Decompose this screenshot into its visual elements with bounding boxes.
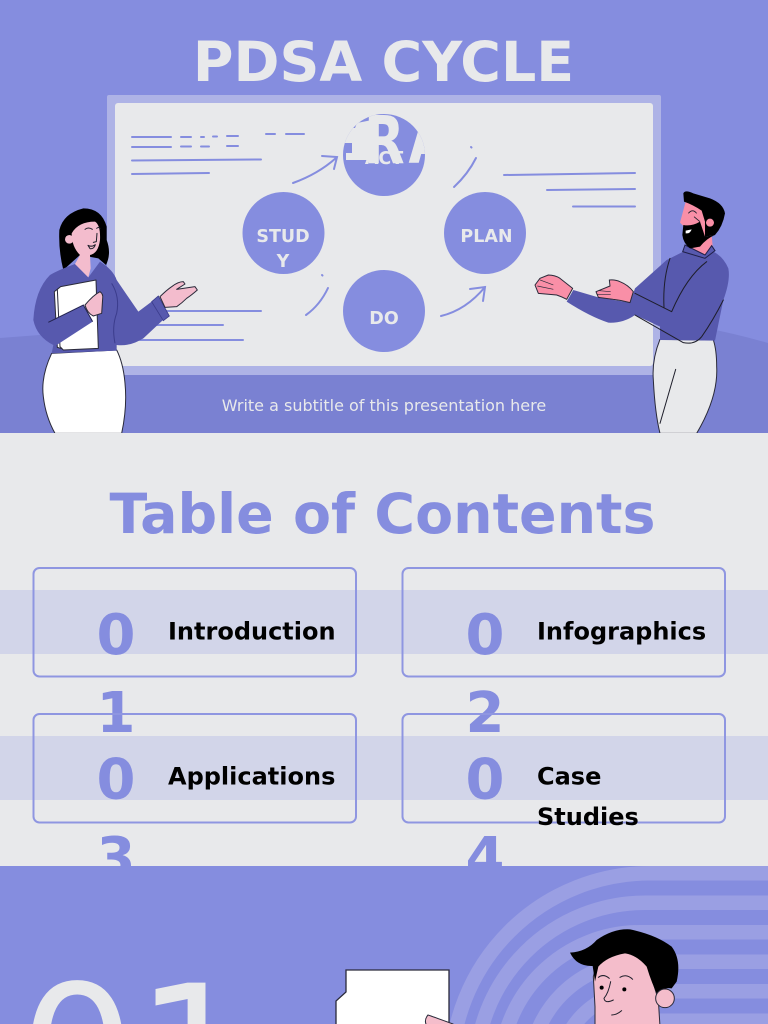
illustration: hand on paper	[425, 1015, 453, 1024]
heading: Table of Contents	[109, 483, 656, 547]
item 02: infographics: 0	[466, 603, 504, 668]
cycle step: study	[242, 192, 324, 274]
cycle step: plan: PLAN	[460, 227, 513, 247]
cycle step: do: DO	[369, 309, 399, 329]
item 02: infographics	[402, 568, 725, 746]
background hill	[0, 330, 768, 433]
arrow: act to plan	[454, 147, 476, 187]
item 02: infographics: 2	[466, 681, 504, 746]
cycle step: study: Y	[276, 252, 290, 272]
panel: section 01	[0, 866, 768, 1024]
item 03: applications: 3	[97, 826, 135, 891]
board text lines, lower left	[140, 311, 261, 340]
cycle step: plan	[444, 192, 526, 274]
cycle step: act: R	[364, 103, 405, 180]
illustration: woman holding papers	[33, 208, 197, 433]
item 01: introduction	[34, 568, 356, 746]
item 02: infographics: Infographics	[537, 618, 706, 646]
item 01: introduction: 0	[97, 603, 135, 668]
arrow: do to plan	[441, 287, 485, 316]
item 03: applications: 0	[97, 748, 135, 812]
illustration: man reading	[570, 929, 678, 1024]
board text lines, upper right	[504, 173, 635, 206]
item 01: introduction: Introduction	[168, 618, 336, 646]
band: row two	[0, 736, 768, 800]
item 04: case studies: Studies	[537, 803, 639, 831]
cycle step: do	[343, 270, 425, 352]
cycle step: act: ACT	[365, 149, 403, 169]
item 04: case studies: 4	[466, 826, 504, 891]
board text lines, upper left	[132, 134, 304, 174]
cycle step: act: A	[408, 103, 449, 180]
panel: table of contents	[0, 491, 768, 866]
band: row one	[0, 590, 768, 654]
illustration: sheet of paper	[336, 970, 449, 1024]
item 04: case studies: Case	[537, 762, 601, 790]
item 03: applications	[32, 713, 357, 866]
concentric arc stripes	[451, 873, 768, 1024]
cycle step: act	[343, 114, 425, 196]
presentation board	[107, 95, 661, 375]
item 01: introduction: 1	[97, 681, 135, 746]
title: PDSA CYCLE	[193, 31, 574, 95]
arrow: study to act	[293, 156, 337, 183]
cycle step: study: STUD	[256, 227, 310, 247]
subtitle: Write a subtitle of this presentation here	[222, 396, 546, 415]
item 03: applications: Applications	[168, 762, 335, 790]
arrow: do to study	[306, 275, 328, 315]
item 04: case studies	[402, 713, 726, 866]
illustration: bearded man gesturing	[535, 191, 729, 433]
panel: title slide	[0, 0, 768, 433]
item 04: case studies: 0	[466, 748, 504, 812]
